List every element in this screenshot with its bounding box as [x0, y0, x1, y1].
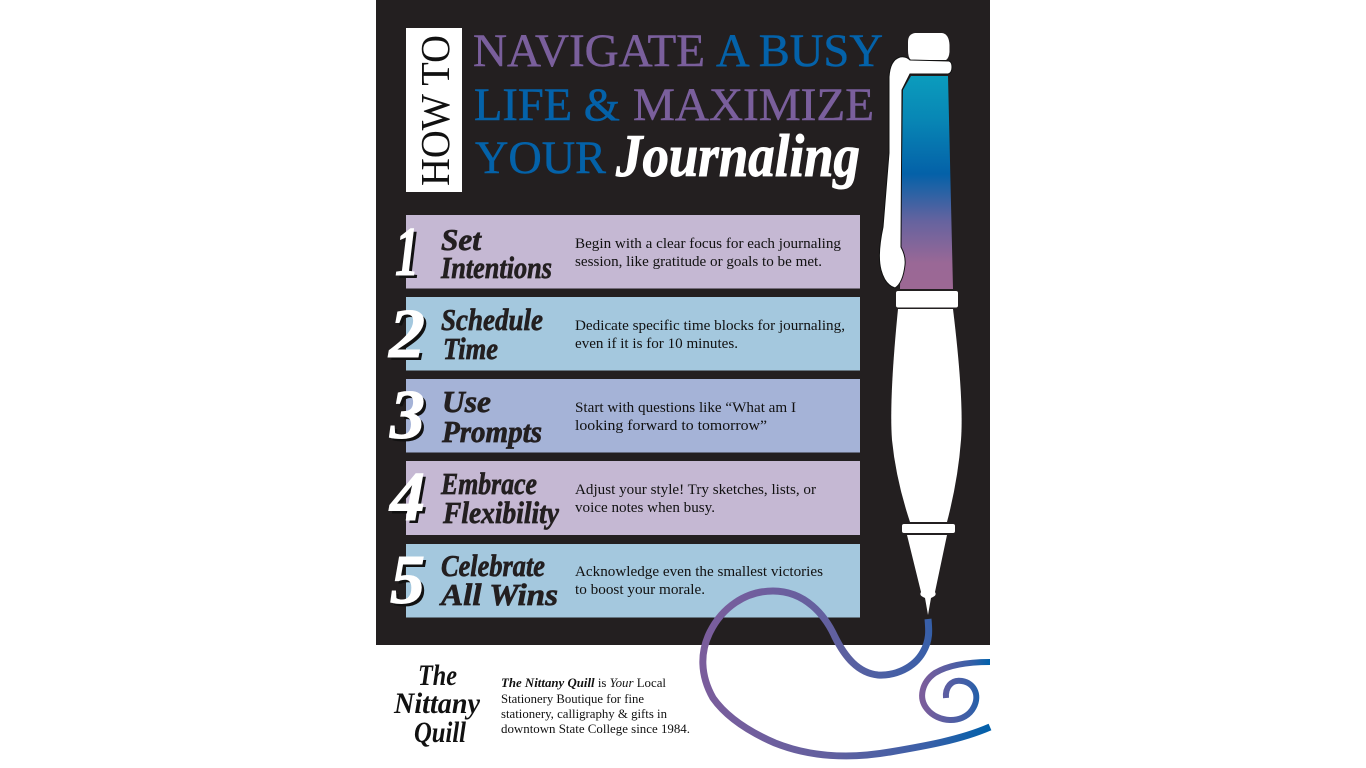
step 2: schedule time	[388, 296, 860, 376]
step 1: set intentions: 1	[395, 214, 419, 291]
step 4: embrace flexibility: 4	[388, 459, 425, 536]
title: Journaling	[615, 123, 860, 189]
step 2: schedule time: Time	[443, 331, 498, 366]
ink line flowing from pen tip	[703, 591, 990, 756]
title	[473, 25, 883, 189]
step 2: schedule time: even if it is for 10 minutes.	[575, 336, 738, 352]
title: YOUR	[475, 132, 607, 184]
footer description: The Nittany Quill is Your Local	[501, 676, 667, 690]
title: MAXIMIZE	[633, 79, 874, 131]
step 4: embrace flexibility: 4	[391, 462, 428, 539]
black background panel	[376, 0, 990, 645]
pen grip	[891, 309, 962, 522]
step 4: embrace flexibility: Flexibility	[442, 495, 559, 530]
step 4: embrace flexibility: voice notes when busy.	[575, 500, 715, 516]
footer description	[501, 676, 690, 736]
logo: the nittany quill: The	[418, 659, 457, 692]
step 3: use prompts: looking forward to tomorrow”	[575, 418, 767, 434]
step 3: use prompts: Use	[442, 384, 491, 419]
step 4: embrace flexibility: Adjust your style! Try sketches, lists, or	[575, 482, 816, 498]
step 2: schedule time: Dedicate specific time blocks for journaling,	[575, 318, 845, 334]
ink spiral	[922, 662, 990, 720]
pen tip	[907, 535, 947, 615]
step 2: schedule time: 2	[391, 299, 428, 376]
footer description: downtown State College since 1984.	[501, 722, 690, 736]
step 5: celebrate all wins: Acknowledge even the smallest victories	[575, 564, 823, 580]
step 3: use prompts	[389, 377, 860, 457]
pen barrel	[900, 76, 953, 289]
step 3: use prompts: 3	[392, 380, 428, 457]
pen ring	[896, 291, 958, 308]
step 1: set intentions	[395, 214, 860, 294]
step 5: celebrate all wins: 5	[393, 545, 428, 622]
step 4: embrace flexibility	[388, 459, 860, 539]
lower ring	[902, 524, 955, 533]
logo: the nittany quill: Quill	[414, 716, 467, 749]
heading label: how to: HOW TO	[412, 35, 458, 186]
step 3: use prompts: Start with questions like “What am I	[575, 400, 796, 416]
title: A BUSY	[716, 25, 883, 77]
step 5: celebrate all wins: 5	[390, 542, 425, 619]
footer description: Stationery Boutique for fine	[501, 692, 644, 706]
step 1: set intentions: Intentions	[440, 250, 552, 285]
pen cap	[908, 33, 950, 60]
logo: the nittany quill	[393, 659, 481, 749]
step 3: use prompts: 3	[389, 377, 425, 454]
step 2: schedule time: Schedule	[441, 302, 543, 337]
step 4: embrace flexibility: Embrace	[440, 466, 537, 501]
step 5: celebrate all wins	[390, 542, 860, 622]
step 3: use prompts: Prompts	[441, 414, 542, 449]
logo: the nittany quill: Nittany	[393, 687, 481, 720]
step 5: celebrate all wins: Celebrate	[441, 548, 545, 583]
title: NAVIGATE	[473, 25, 705, 77]
step 1: set intentions: Begin with a clear focus for each journaling	[575, 236, 841, 252]
step 5: celebrate all wins: to boost your morale.	[575, 582, 705, 598]
footer description: stationery, calligraphy & gifts in	[501, 707, 668, 721]
title: LIFE &	[474, 79, 620, 131]
step 1: set intentions: Set	[441, 222, 482, 257]
step 5: celebrate all wins: All Wins	[439, 577, 558, 612]
step 1: set intentions: session, like gratitude or goals to be met.	[575, 254, 822, 270]
illustration: pen	[879, 33, 962, 615]
step 2: schedule time: 2	[388, 296, 425, 373]
pen clip	[879, 57, 952, 288]
step 1: set intentions: 1	[398, 217, 422, 294]
